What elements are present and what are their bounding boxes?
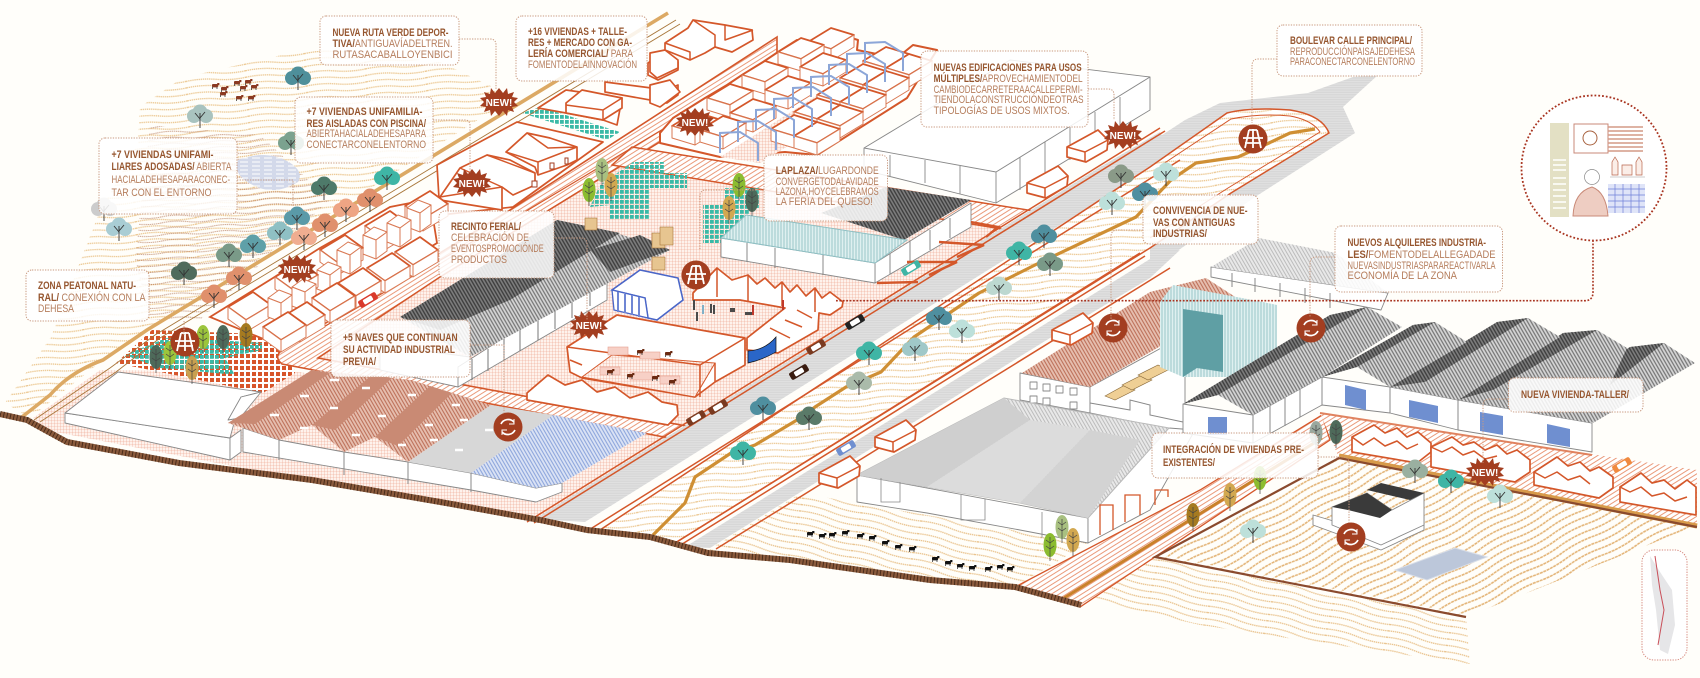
field: fenced plot [1155,458,1695,617]
callout: 7 viviendas aisladas: RES AISLADAS CON PISCINA/ [306,118,426,130]
callout: nuevas edificaciones: NUEVAS EDIFICACIONES PARA USOS [934,62,1082,74]
upper housing strip [538,20,753,125]
badge: NEW group: NEW! [486,98,512,109]
ground: lower left industrial pink [33,370,683,518]
pool [1395,548,1487,580]
callout: la plaza: LAZONA,HOYCELEBRAMOS [776,186,879,198]
field: lower right beyond fence [1090,557,1470,664]
badge: NEW group: NEW! [576,321,602,332]
callout: nuevas edificaciones: CAMBIODECARRETERAACALLEPERMI- [934,84,1083,96]
fence [1155,456,1697,617]
callout: nuevas edificaciones [921,51,1088,127]
callout: 7 viviendas aisladas [295,97,433,163]
callout: nueva ruta verde: NUEVA RUTA VERDE DEPOR- [332,27,449,39]
ground: central plaza [300,155,1029,433]
callout: boulevar: REPRODUCCIÓNPAISAJEDEHESA [1290,45,1415,58]
callout: zona peatonal [26,270,149,321]
street: right diagonal [1015,415,1330,607]
upper mixed-use cube block [660,28,937,163]
blue frame structure [720,42,903,161]
callout: convivencia: INDUSTRIAS/ [1153,228,1207,240]
vignette: dehesa products [1522,96,1666,240]
callout connectors [184,39,1508,523]
teal tower [1160,285,1277,377]
left housing strip lot outline [210,203,437,343]
right naves roofs [1183,307,1695,423]
market building [567,315,745,397]
callout: nuevos alquileres [1335,226,1502,292]
big grey nave [857,398,1195,543]
callout: zona peatonal: DEHESA [38,303,75,315]
callout: integracion: EXISTENTES/ [1163,457,1215,469]
callout: nueva ruta verde [320,16,459,65]
right naves walls [1183,377,1592,455]
street: right back strip [1320,413,1697,527]
callout: zona peatonal: RAL/ CONEXIÓN CON LA [38,291,146,304]
badge: NEW group: NEW! [1472,468,1498,479]
road: left ring road [278,37,777,442]
white building bottom left [65,372,261,460]
callout: 16 viviendas: LERÍA COMERCIAL/ PARA [528,47,633,60]
shed with teal roof [721,187,971,283]
road: second grey [685,250,1180,548]
callout: convivencia: CONVIVENCIA DE NUE- [1153,205,1248,217]
terrain edge [0,414,1081,605]
green route [22,13,680,422]
blue doors [1208,385,1570,447]
callout: 5 naves: SU ACTIVIDAD INDUSTRIAL [343,344,455,356]
callout: 7 viviendas aisladas: +7 VIVIENDAS UNIFAMILIA- [306,106,423,118]
callout: recinto ferial: CELEBRACIÓN DE [451,231,529,244]
callout: convivencia: VAS CON ANTIGUAS [1153,217,1235,229]
callout: boulevar: BOULEVAR CALLE PRINCIPAL/ [1290,35,1412,47]
callout: nuevos alquileres: NUEVASINDUSTRIASPARAREACTIVARLA [1348,260,1496,272]
callout: nuevos alquileres: LES/FOMENTODELALLEGADADE [1348,249,1496,261]
callout: vivienda taller: NUEVA VIVIENDA-TALLER/ [1521,389,1629,401]
callout: 7 viviendas aisladas: ABIERTAHACIALADEHESAPARA [306,128,426,140]
blue banner [748,337,776,363]
callout: 7 viviendas aisladas: CONECTARCONELENTORNO [306,139,426,151]
red roof building [1020,278,1240,432]
blue pavilion [612,270,683,320]
badge: NEW group: NEW! [284,265,310,276]
road edges [527,128,1180,549]
field: left dehesa [5,47,514,418]
back grey building [1211,238,1388,310]
callout: 16 viviendas [516,16,647,81]
orange brick piles [877,222,998,283]
callout: boulevar: PARACONECTARCONELENTORNO [1290,56,1415,68]
callout: nuevas edificaciones: MÚLTIPLES/APROVECHAMIENTODEL [934,72,1083,85]
callout: 7 viviendas adosadas: TAR CON EL ENTORNO [112,187,212,199]
nave grey roof [408,405,553,473]
callout: nuevas edificaciones: TIPOLOGÍAS DE USOS MIXTOS. [934,104,1070,117]
left housing strip cubes [228,191,448,352]
callout: 7 viviendas adosadas: +7 VIVIENDAS UNIFAMI- [112,149,214,161]
callout: recinto ferial: PRODUCTOS [451,254,507,266]
callout: 16 viviendas: FOMENTODELAINNOVACIÓN [528,58,637,71]
road: upper crossing street [612,147,1040,232]
road: left ring middle line [278,107,700,353]
park: left check and teal [116,330,295,393]
sawtooth houses plaza [693,268,843,353]
callout: nueva ruta verde: RUTASACABALLOYENBICI [332,49,452,61]
badge: NEW group: NEW! [1110,131,1136,142]
naves red roofs [228,370,491,462]
callout: vivienda taller [1508,378,1643,412]
badge: NEW group: NEW! [459,179,485,190]
left housing lot with houses [437,122,603,215]
callout: 5 naves: +5 NAVES QUE CONTINUAN [343,332,458,344]
recinto ferial shed [380,220,670,387]
callout: convivencia [1143,195,1258,244]
herd: cattle with shepherd [807,530,1014,572]
locator map [1642,550,1687,660]
badge: NEW group [278,88,1504,486]
silos [585,218,673,270]
callout: la plaza [764,155,888,221]
road: grey flare [1150,75,1378,270]
boulevard [600,109,1329,543]
field house [1313,483,1424,550]
trees: round [91,66,1513,543]
road: main grey [535,132,1175,522]
trees: oval [150,158,1342,561]
callout: 16 viviendas: RES + MERCADO CON GA- [528,37,632,49]
callout: nuevas edificaciones: TIENDOLACONSTRUCCIÓNDEOTRAS [934,93,1084,106]
callout: 5 naves [331,320,470,377]
vehicles [357,259,1633,474]
callout: 7 viviendas adosadas: HACIALADEHESAPARACONEC- [112,174,230,186]
field: lower middle dehesa [708,493,1088,587]
wood stacks [1105,365,1168,400]
small houses along streets [819,130,1108,488]
white building multipurpose [864,60,1150,203]
callout: la plaza: LA FERIA DEL QUESO! [776,196,873,208]
shop fronts [1100,490,1168,535]
people at plaza [693,300,784,321]
pond [237,155,300,190]
callout: 7 viviendas adosadas [99,138,237,214]
icon: recycle markers [494,314,1366,552]
herd: upper cattle [212,79,258,101]
callout: nuevos alquileres: NUEVOS ALQUILERES INDUSTRIA- [1348,237,1486,249]
dotted link to vignette [836,241,1593,301]
callout: 5 naves: PREVIA/ [343,356,376,368]
badge: NEW group: NEW! [682,118,708,129]
callout: recinto ferial [439,211,554,278]
callout: zona peatonal: ZONA PEATONAL NATU- [38,280,136,292]
callout: recinto ferial: RECINTO FERIAL/ [451,221,521,233]
nave blue roof [471,415,647,488]
park: plaza teal squares [522,107,760,243]
icon: landscape markers [170,124,1268,356]
naves walls [243,428,562,502]
callout: recinto ferial: EVENTOSPROMOCIÓNDE [451,242,544,255]
callout: boulevar [1277,25,1422,76]
callout: nueva ruta verde: TIVA/ANTIGUAVÍADELTREN. [332,37,452,50]
callout: integracion: INTEGRACIÓN DE VIVIENDAS PRE- [1163,443,1304,456]
callout: 16 viviendas: +16 VIVIENDAS + TALLE- [528,26,627,38]
callout: nuevos alquileres: ECONOMÍA DE LA ZONA [1348,269,1458,282]
callout: la plaza: CONVERGETODALAVIDADE [776,176,879,188]
callout: 7 viviendas adosadas: LIARES ADOSADAS/ ABIERTA [112,161,232,173]
callout: la plaza: LAPLAZA/LUGARDONDE [776,165,879,177]
callout: integracion [1152,433,1318,478]
sawtooth houses right [1352,425,1696,515]
sawtooth houses market [527,375,678,425]
